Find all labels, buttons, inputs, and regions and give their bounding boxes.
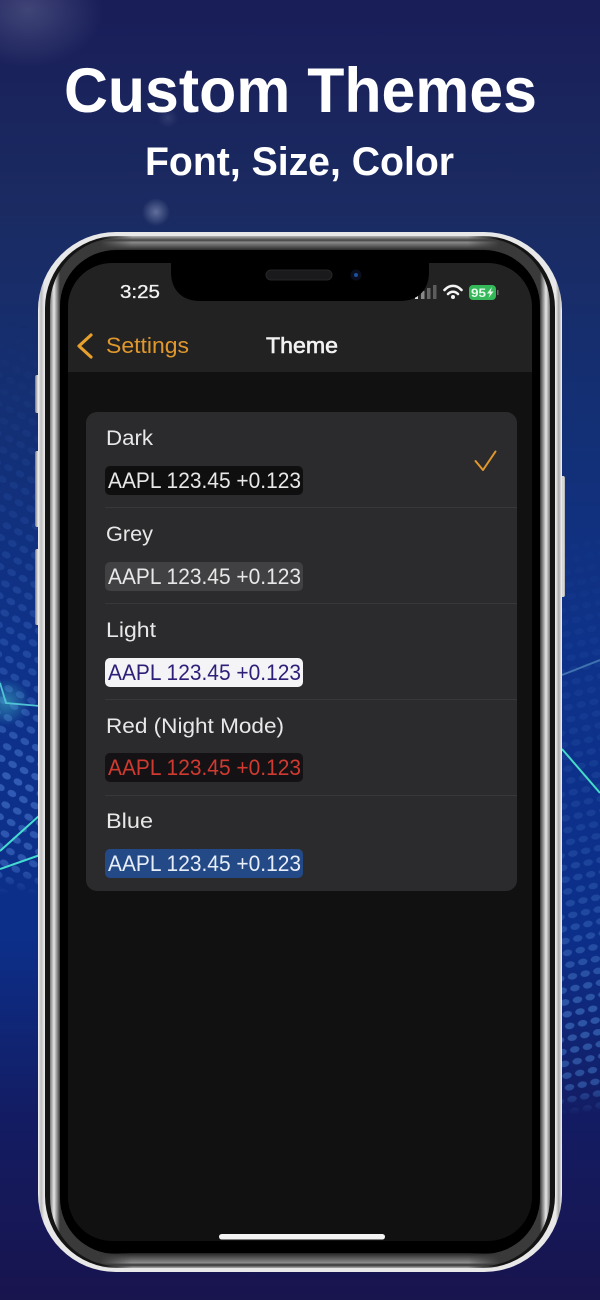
theme row: blue: Blue <box>106 810 153 833</box>
panel: theme list <box>86 412 517 891</box>
icon: checkmark <box>476 452 496 470</box>
theme row: dark: Dark <box>106 427 154 450</box>
phone frame <box>38 232 562 1272</box>
theme row: light: Light <box>106 619 156 642</box>
theme row: dark: AAPL 123.45 +0.123 <box>108 468 301 493</box>
icon: battery: 95 <box>471 286 486 300</box>
nav title: Theme <box>266 333 338 358</box>
back chevron <box>79 335 91 357</box>
theme row: light: AAPL 123.45 +0.123 <box>108 660 301 685</box>
navigation bar <box>68 263 532 372</box>
home indicator <box>219 1234 385 1240</box>
back label: Settings <box>106 333 189 358</box>
theme row: red: AAPL 123.45 +0.123 <box>108 755 301 780</box>
notch <box>171 258 429 301</box>
theme row: blue <box>105 810 303 878</box>
theme row: grey: Grey <box>106 523 154 546</box>
side buttons <box>35 375 565 625</box>
theme row: red <box>105 715 303 782</box>
phone mockup <box>35 232 565 1272</box>
screen <box>68 263 532 1241</box>
theme row: red: Red (Night Mode) <box>106 715 284 738</box>
icon: wifi <box>444 286 462 299</box>
theme row: blue: AAPL 123.45 +0.123 <box>108 851 301 876</box>
title: Custom Themes <box>64 56 537 126</box>
theme row: grey <box>105 523 303 591</box>
status bar time: 3:25 <box>120 282 160 302</box>
theme row: grey: AAPL 123.45 +0.123 <box>108 564 301 589</box>
subtitle: Font, Size, Color <box>145 140 454 184</box>
icon: battery <box>469 285 498 300</box>
status bar signal <box>415 285 436 299</box>
theme row: dark <box>105 427 303 495</box>
theme row: light <box>105 619 303 687</box>
